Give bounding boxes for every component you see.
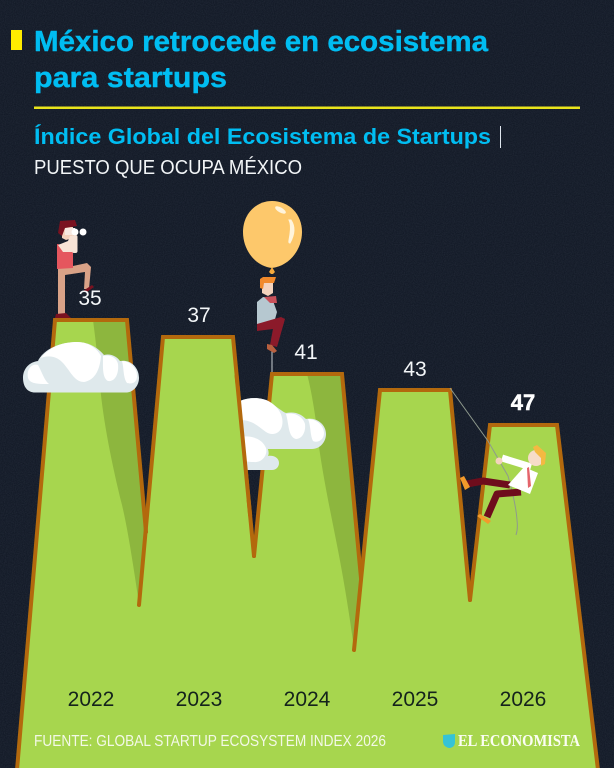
- subtitle: PUESTO QUE OCUPA MÉXICO: [34, 156, 302, 179]
- value: 35: 35: [78, 287, 102, 310]
- year labels: [68, 688, 546, 711]
- mountain: green silhouette: [17, 318, 598, 768]
- source note: FUENTE: GLOBAL STARTUP ECOSYSTEM INDEX 2026: [34, 733, 386, 750]
- mountain chart: [17, 318, 598, 768]
- cloud: centre: [240, 398, 326, 470]
- cloud: left: [23, 342, 139, 392]
- title: [11, 26, 489, 94]
- peak 2023 front edge: [225, 375, 250, 516]
- value: 47: 47: [511, 390, 535, 415]
- year labels: 2024: [284, 688, 331, 711]
- year labels: 2023: [176, 688, 222, 711]
- person: climber with rope: [450, 388, 546, 535]
- title: para startups: [34, 62, 227, 94]
- value: 43: 43: [403, 358, 427, 381]
- value: 41: 41: [294, 341, 318, 364]
- value: 37: 37: [187, 304, 211, 327]
- year labels: 2022: [68, 688, 114, 711]
- title: México retrocede en ecosistema: [34, 26, 489, 58]
- year labels: 2025: [392, 688, 438, 711]
- peak shading: [93, 320, 360, 649]
- subtitle: Índice Global del Ecosistema de Startups: [34, 124, 491, 149]
- balloon: [243, 201, 302, 274]
- person: binoculars on 2022 peak: [55, 220, 94, 318]
- subtitle: [34, 124, 501, 179]
- standing leg and raised leg: [58, 263, 91, 314]
- mountain outline: [17, 320, 598, 768]
- logo: El Economista: EL ECONOMISTA: [458, 731, 580, 750]
- person: hanging from balloon: [257, 277, 285, 372]
- year labels: 2026: [500, 688, 546, 711]
